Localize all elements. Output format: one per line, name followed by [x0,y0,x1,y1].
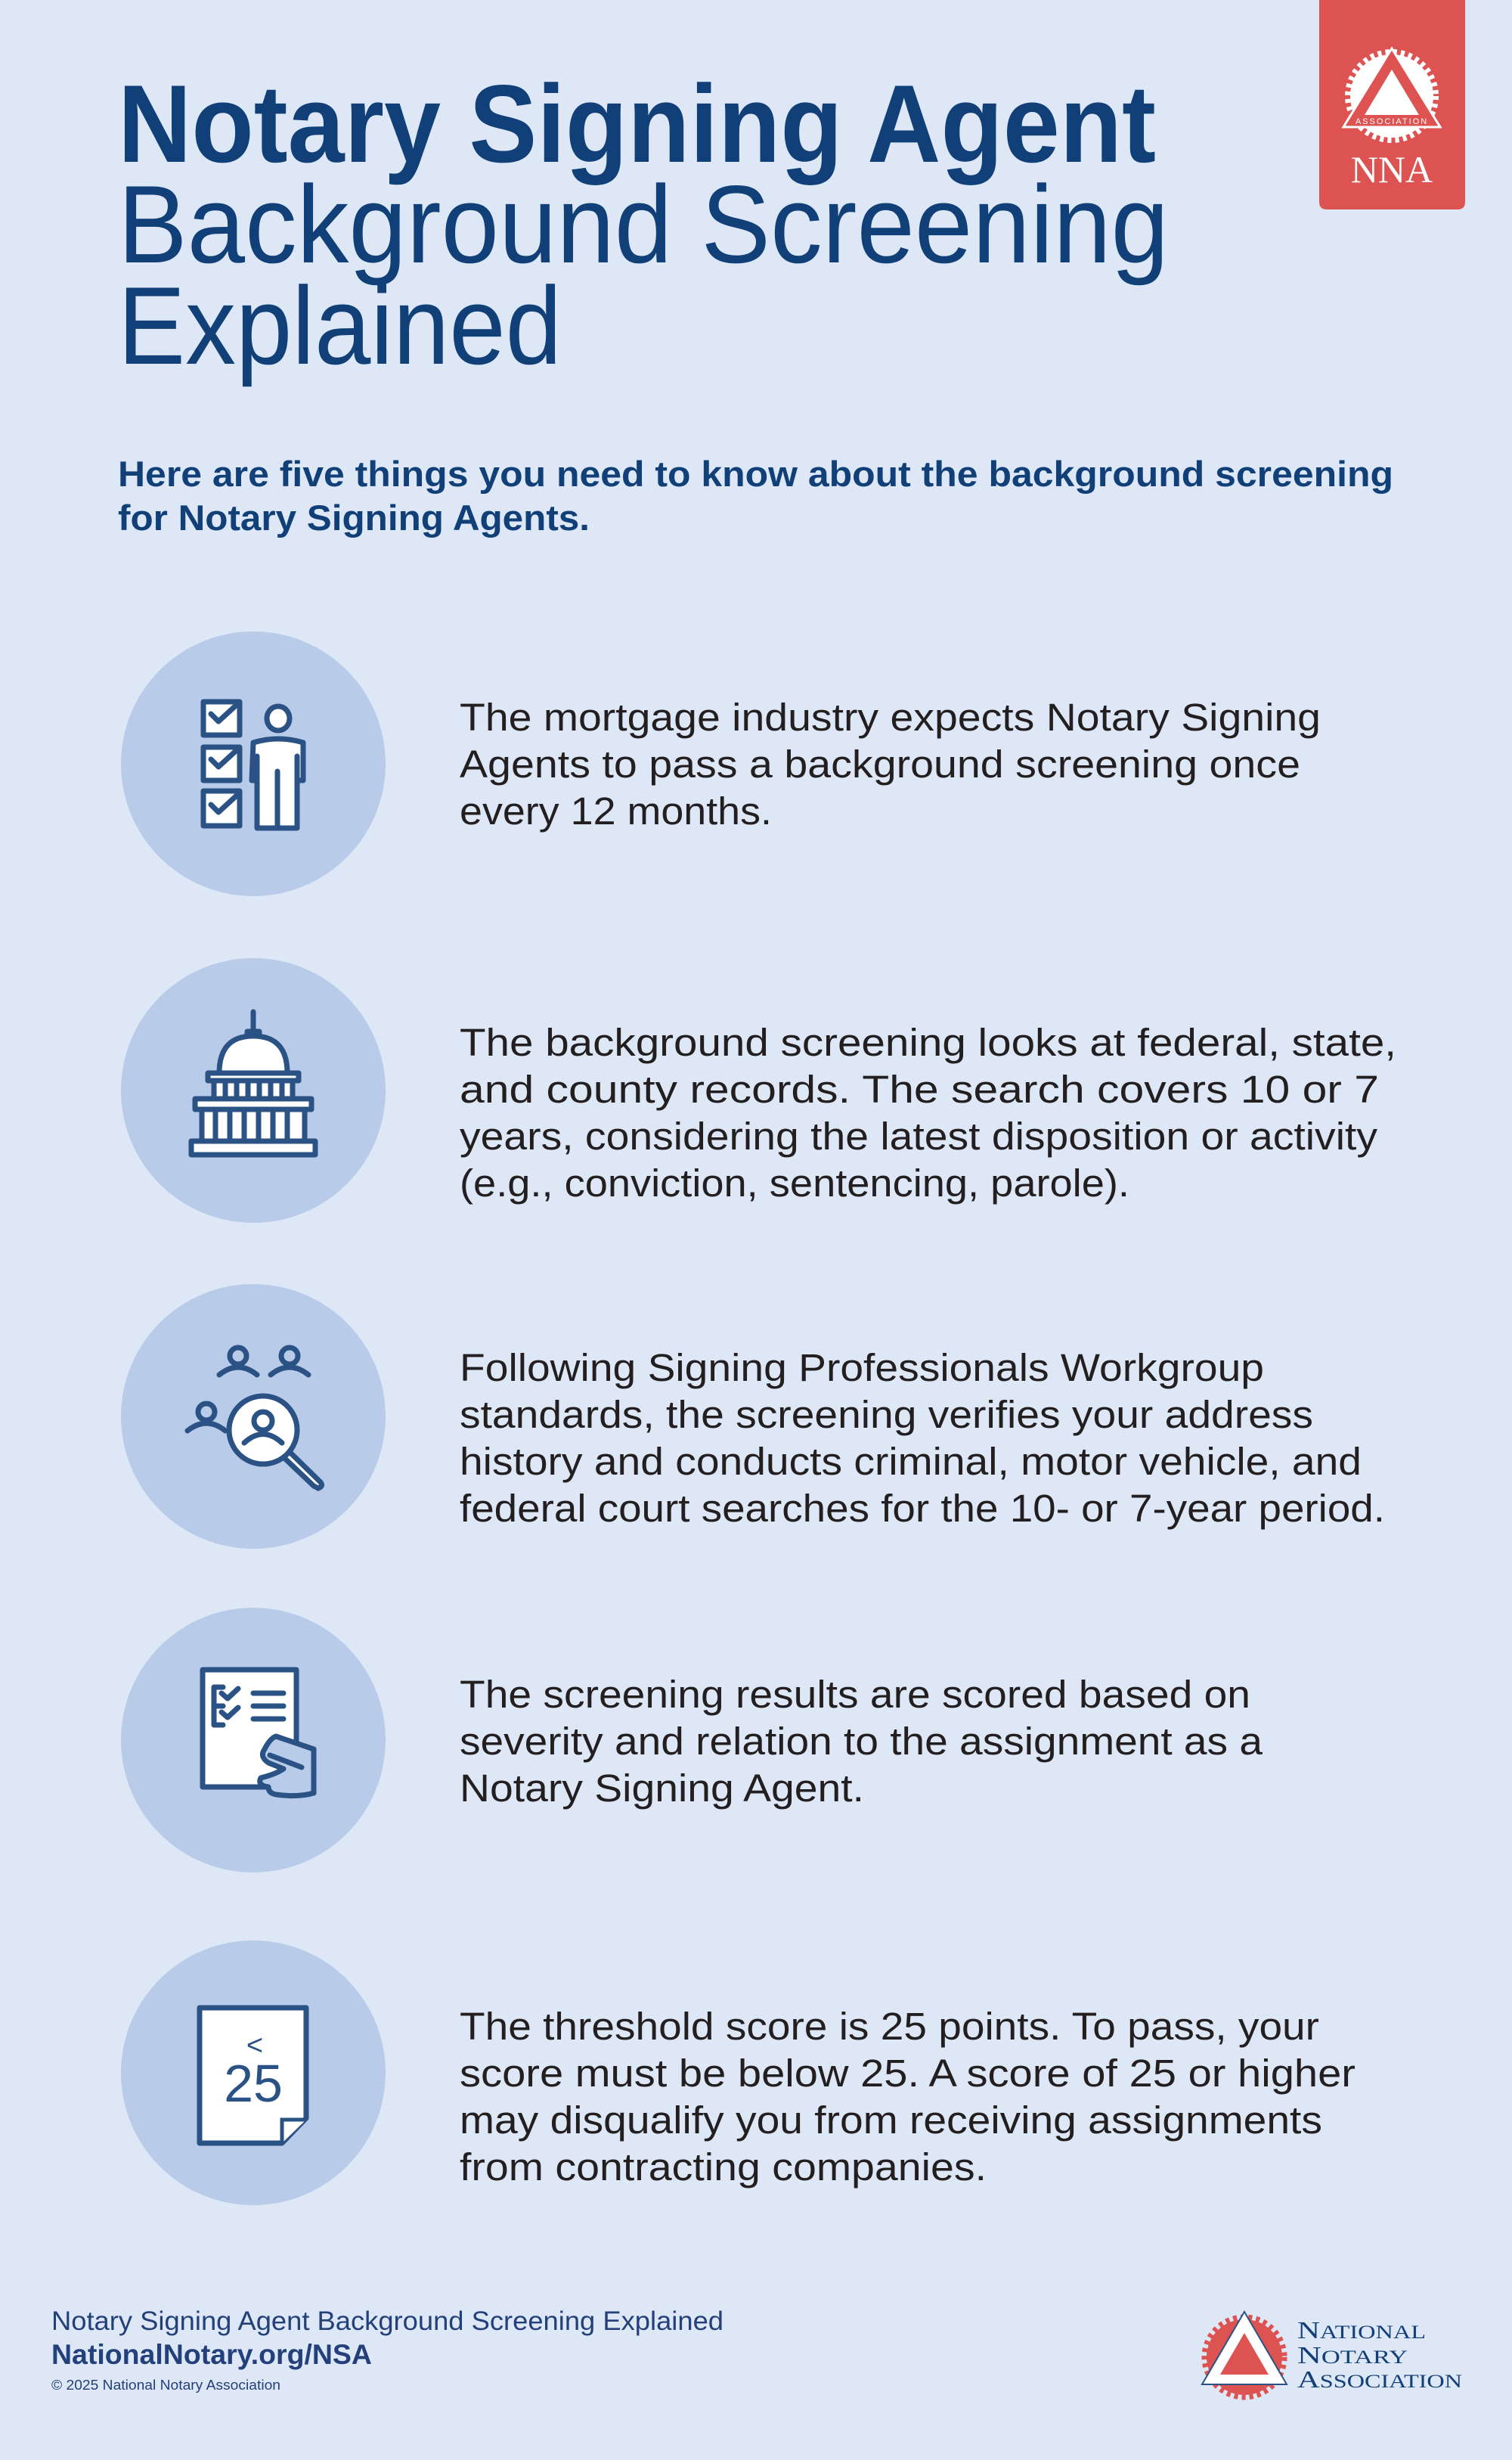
footer logo: N ATIONAL [1297,2316,1426,2344]
text 3: history and conducts criminal, motor vehicle, and [460,1440,1362,1483]
text 5: The threshold score is 25 points. To pass, your [460,2005,1319,2048]
title: Explained [118,264,562,387]
text 3: Following Signing Professionals Workgroup [460,1346,1264,1389]
text 2 [460,1021,1396,1205]
footer logo: A SSOCIATION [1297,2365,1462,2393]
text 3 [460,1346,1385,1530]
footer text: NationalNotary.org/NSA [51,2339,372,2370]
title: Background Screening [118,163,1169,286]
text 4 [460,1673,1263,1810]
text 2: and county records. The search covers 10 or 7 [460,1068,1379,1111]
icon: document with <25 [121,1940,386,2205]
text 5 [460,2005,1356,2189]
text 4: Notary Signing Agent. [460,1767,864,1810]
intro text: for Notary Signing Agents. [118,498,590,538]
item 4 [121,1608,1263,1872]
item 2 [121,958,1396,1223]
footer text: © 2025 National Notary Association [51,2378,280,2393]
text 1 [460,696,1321,833]
text 2: years, considering the latest disposition or activity [460,1115,1378,1158]
text 4: severity and relation to the assignment as a [460,1720,1263,1763]
icon: document with <25: < [246,2030,263,2061]
text 3: federal court searches for the 10- or 7-year period. [460,1487,1385,1530]
text 2: (e.g., conviction, sentencing, parole). [460,1162,1129,1205]
text 1: The mortgage industry expects Notary Signing [460,696,1321,739]
text 1: every 12 months. [460,789,772,833]
intro text [118,454,1393,538]
text 3: standards, the screening verifies your address [460,1393,1313,1436]
item 3 [121,1284,1385,1549]
text 5: may disqualify you from receiving assignments [460,2099,1322,2142]
footer text: Notary Signing Agent Background Screening Explained [51,2306,723,2336]
text 2: The background screening looks at federal, state, [460,1021,1396,1064]
text 4: The screening results are scored based on [460,1673,1250,1716]
logo: NNA red tab: ASSOCIATION [1356,117,1428,126]
logo: NNA red tab: NNA [1351,148,1433,191]
text 5: from contracting companies. [460,2145,987,2189]
icon: people with magnifier [121,1284,386,1549]
icon: document with <25: 25 [224,2054,283,2113]
item 1 [121,631,1321,896]
title [118,62,1169,387]
intro text: Here are five things you need to know about the background screening [118,454,1393,494]
icon: capitol building [121,958,386,1223]
icon: checklist document in hand [121,1608,386,1872]
footer text [51,2306,723,2393]
text 1: Agents to pass a background screening once [460,743,1300,786]
title: Notary Signing Agent [118,62,1156,185]
text 5: score must be below 25. A score of 25 or higher [460,2052,1356,2095]
footer logo: N OTARY [1297,2341,1408,2368]
icon: checklist person [121,631,386,896]
logo: NNA red tab [1319,0,1465,209]
item 5 [121,1940,1356,2205]
footer logo [1202,2312,1462,2396]
